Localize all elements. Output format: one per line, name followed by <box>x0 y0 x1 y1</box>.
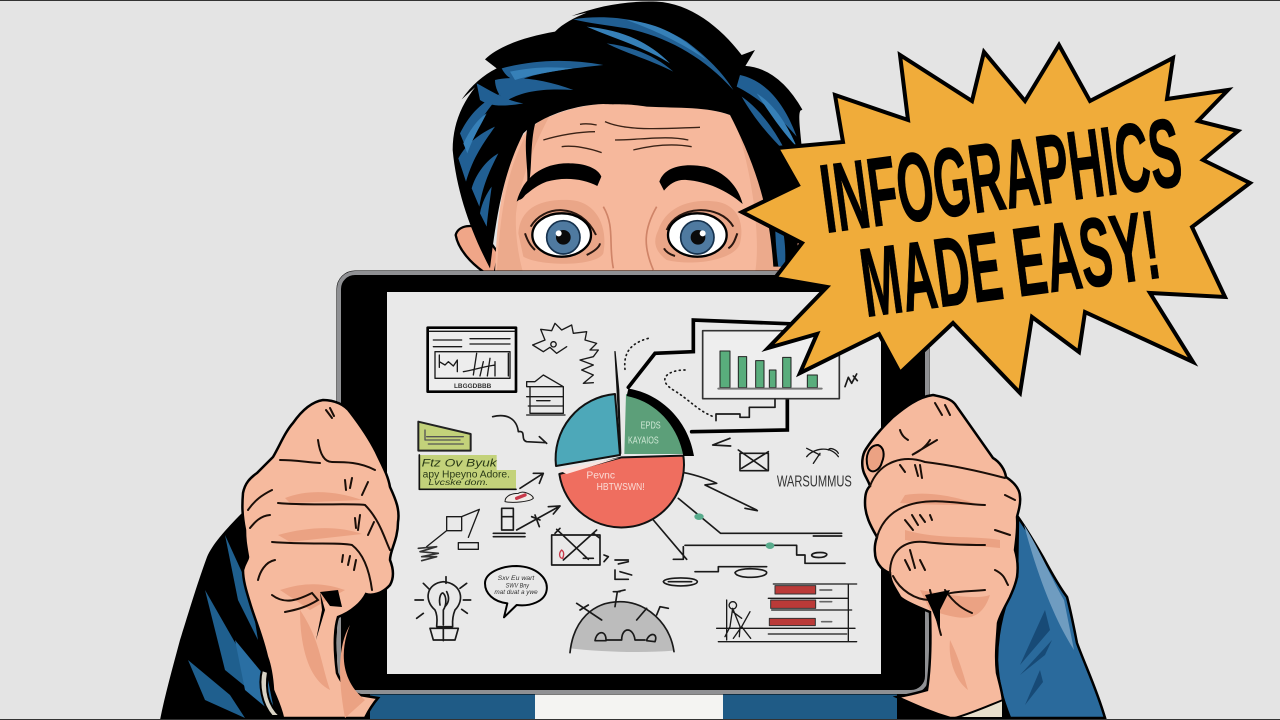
pie slice: teal <box>556 394 620 466</box>
sketch: stepped line with dot <box>653 520 845 563</box>
jacket and shirt <box>160 513 1107 720</box>
sketch: dashboard window <box>428 328 516 392</box>
pie slice: red <box>559 456 684 527</box>
left hand shading <box>278 492 365 718</box>
sketch: curved arrow <box>493 416 547 443</box>
tablet screen <box>387 292 881 674</box>
bubble line 2: SWV Bny <box>506 582 530 589</box>
hair <box>453 2 802 268</box>
sketch: speech bubble <box>485 566 547 617</box>
face shading <box>497 115 783 273</box>
sketch: right label: WARSUMMUS <box>777 474 852 491</box>
step line <box>716 399 775 421</box>
sketch: scribble <box>418 547 438 561</box>
left eye <box>525 210 600 257</box>
sketch: arrow up right <box>520 473 543 488</box>
bubble line 1: Sxv Eu wart <box>498 575 536 582</box>
green slice label: EPDS <box>641 420 661 431</box>
pie pointer spike <box>615 352 621 453</box>
callout frame with bar chart <box>627 320 857 456</box>
pie chart <box>556 352 684 527</box>
sketch: grey dome <box>570 590 674 653</box>
sketch: red cloud <box>505 492 533 502</box>
sketch: red bar chart <box>717 584 857 642</box>
pie slice highlight <box>558 458 620 474</box>
thick pie arc <box>627 389 694 456</box>
dashboard caption: LBGGDBBB <box>454 384 492 390</box>
sketch: ovals <box>663 567 767 586</box>
presenter figure <box>725 600 751 640</box>
sketch: scribble burst <box>533 323 598 383</box>
right hand lines <box>870 403 1015 635</box>
chart panel <box>703 331 839 399</box>
sketch: red cloud mark <box>517 495 525 498</box>
left hand <box>242 400 399 718</box>
sketch: dotted curve <box>625 338 648 369</box>
left eyebrow <box>517 163 601 202</box>
forehead wrinkles <box>543 122 700 153</box>
sketch: right arrows <box>678 473 842 536</box>
face <box>495 103 783 273</box>
green slice label 2: KAYAIOS <box>628 435 659 446</box>
sketch: building <box>527 375 565 415</box>
right eyebrow <box>659 165 743 204</box>
right hand shading <box>900 494 1000 690</box>
sketch: light bulb <box>415 577 471 641</box>
tablet <box>337 271 929 694</box>
red slice label: Pevnc <box>586 470 615 481</box>
small mark <box>845 374 857 387</box>
bubble line 3: mat duat a ywe <box>494 589 538 596</box>
head <box>453 2 805 273</box>
sketch: green dot lower <box>766 542 774 549</box>
right hand <box>862 395 1020 718</box>
starburst badge <box>742 45 1250 393</box>
red slice label 2: HBTWSWN! <box>597 482 645 493</box>
sketch: callout arrow left <box>713 438 731 446</box>
sketch: green dot upper <box>694 513 704 520</box>
right wristband <box>955 700 1003 718</box>
left wristband <box>260 670 280 716</box>
screen sketches <box>415 320 857 653</box>
note line 2: apy Hpeyno Adore. <box>423 469 510 480</box>
sketch: small marks <box>604 555 632 579</box>
right hand finger gap <box>925 590 950 630</box>
sketch: arcs above label <box>807 448 838 463</box>
green bars <box>720 351 817 388</box>
left ear <box>456 226 498 272</box>
right eye <box>664 210 737 257</box>
pie slice: green <box>624 394 683 454</box>
sketch: red mark <box>560 550 564 558</box>
sketch: crossed box <box>552 528 600 565</box>
left hand lines <box>248 408 390 612</box>
right hand thumb nail <box>867 445 884 471</box>
note line 3: Lvcske dom. <box>428 478 488 487</box>
nose lines <box>603 207 657 270</box>
sketch: green text box <box>419 455 516 489</box>
sketch: crossed box right <box>738 450 768 471</box>
dotted connector <box>665 370 713 417</box>
note line 1: Ftz Ov Byuk <box>422 458 498 470</box>
sketch: green note <box>418 422 471 451</box>
sketch: flow nodes <box>427 509 479 549</box>
right ear <box>780 233 805 273</box>
sketch: cylinder and arrow <box>493 506 560 537</box>
left hand finger gap <box>316 590 342 640</box>
